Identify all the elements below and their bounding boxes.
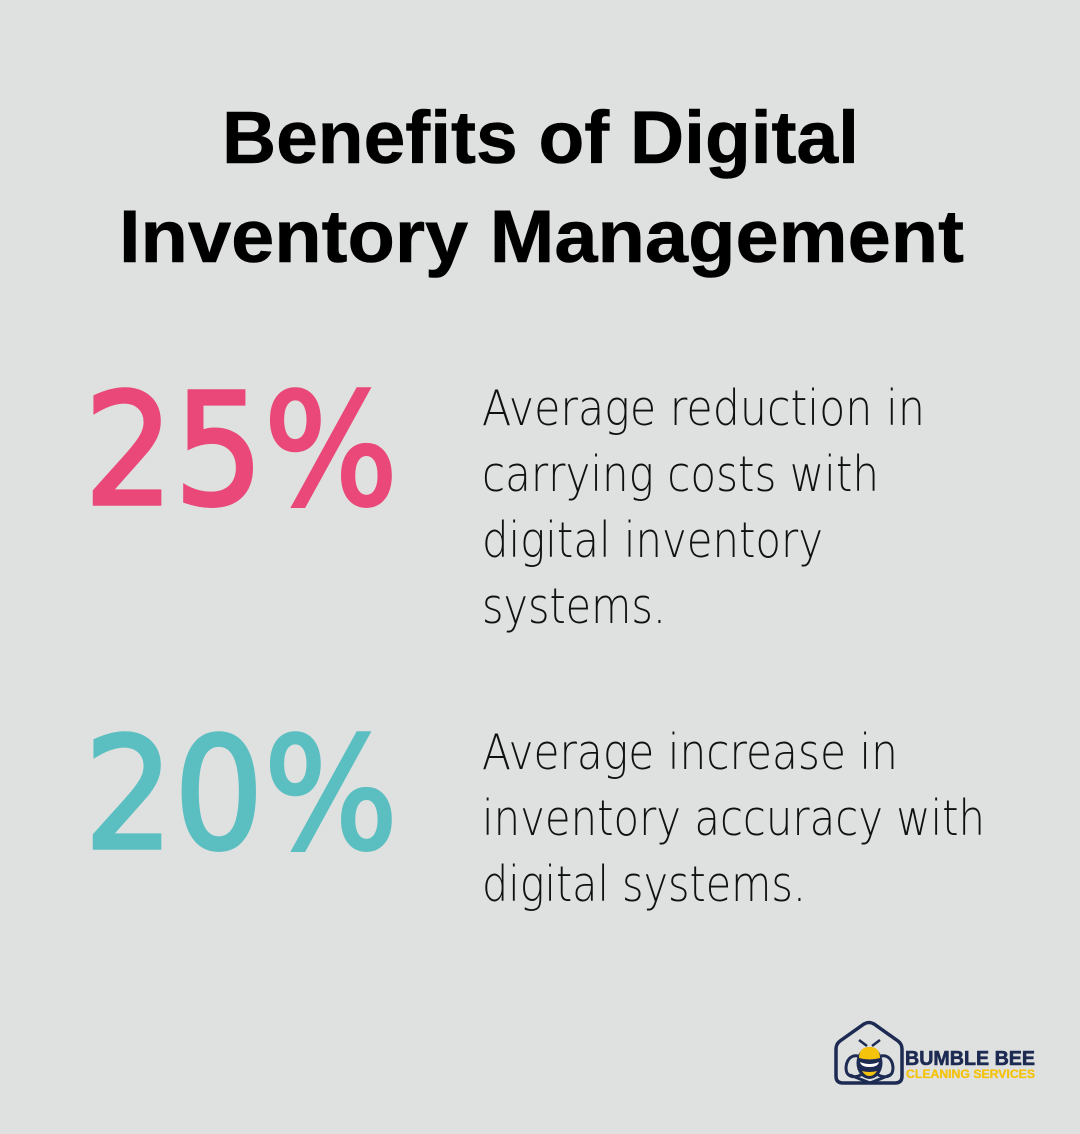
description: inventory accuracy: inventory accuracy with xyxy=(482,790,985,847)
title xyxy=(119,96,964,278)
stat: 20%: 20% xyxy=(84,704,398,885)
logo: Bumble Bee Cleaning Services xyxy=(836,1022,1035,1083)
description: carrying costs: digital inventory xyxy=(482,512,823,569)
stat: 25%: 25% xyxy=(84,360,398,541)
logo tagline: CLEANING SERVICES xyxy=(906,1067,1035,1081)
title: Inventory Management xyxy=(119,195,964,278)
logo wordmark: BUMBLE BEE xyxy=(905,1048,1035,1070)
icon: house with bee xyxy=(836,1022,902,1083)
description: carrying costs: carrying costs with xyxy=(482,446,879,503)
description: carrying costs: systems. xyxy=(482,578,666,635)
description: inventory accuracy xyxy=(482,724,985,913)
description: carrying costs xyxy=(482,380,925,635)
description: inventory accuracy: digital systems. xyxy=(482,856,806,913)
description: carrying costs: Average reduction in xyxy=(482,380,925,437)
title: Benefits of Digital xyxy=(222,96,859,179)
description: inventory accuracy: Average increase in xyxy=(482,724,898,781)
